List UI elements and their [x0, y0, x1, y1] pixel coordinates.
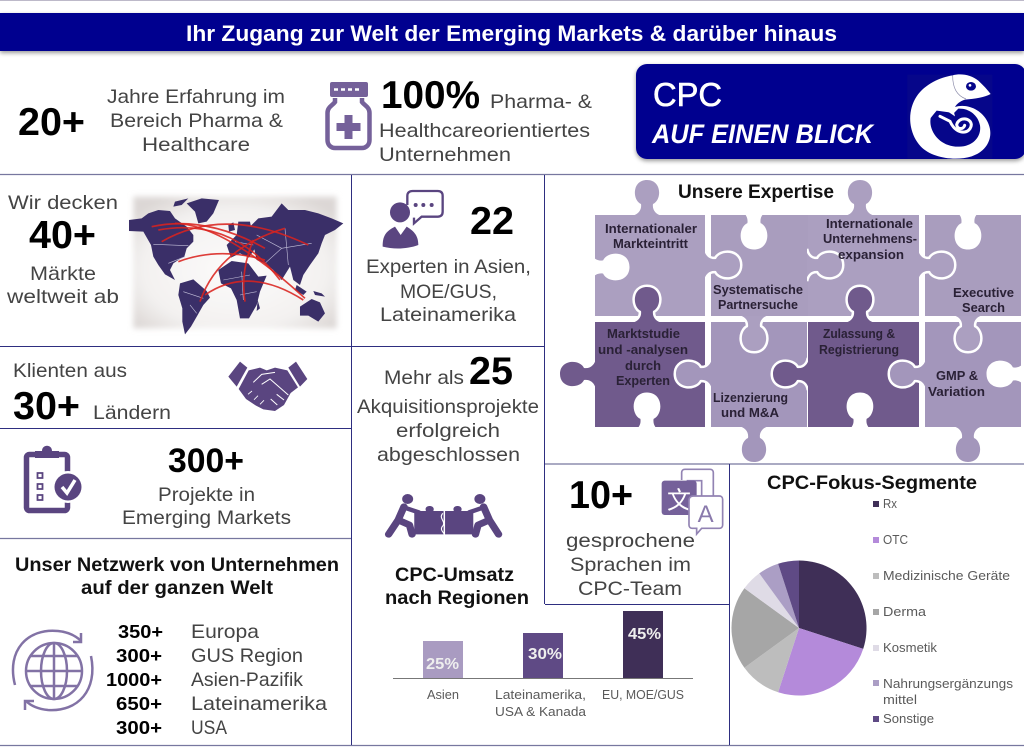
puzzle labels: Markteintritt — [613, 237, 689, 251]
stat: clients from 30+ countries: 30+ — [13, 385, 80, 428]
bar chart: revenue: 45% — [628, 626, 661, 643]
icon: clipboard with check — [26, 446, 84, 510]
stat: 40+ markets: 40+ — [29, 214, 96, 257]
stat: 300+ projects: Projekte in — [158, 484, 255, 506]
puzzle labels: durch — [625, 359, 661, 373]
list: network numbers: 350+ — [118, 621, 163, 642]
heading: network: Unser Netzwerk von Unternehmen — [15, 555, 339, 576]
puzzle labels: und -analysen — [598, 343, 688, 357]
stat: 300+ projects: Emerging Markets — [122, 507, 291, 529]
icon: handshake — [228, 362, 307, 411]
stat: 22 experts: Experten in Asien, — [366, 256, 531, 278]
bar chart: revenue: EU, MOE/GUS — [602, 688, 684, 702]
stat: 300+ projects — [122, 442, 291, 529]
puzzle labels: Variation — [928, 385, 985, 399]
stat: 100% pharma: 100% — [381, 74, 480, 117]
pie legend: Sonstige — [883, 712, 934, 726]
stat: clients from 30+ countries: Klienten aus — [13, 360, 127, 382]
heading: revenue by region — [385, 565, 529, 609]
puzzle labels: Internationale — [826, 217, 913, 231]
title banner: Ihr Zugang zur Welt der Emerging Markets & darüber hinaus — [186, 21, 837, 46]
bar chart: revenue — [393, 611, 693, 719]
stat: 25 acquisition projects: erfolgreich — [396, 420, 500, 442]
icon: medicine bottle — [328, 82, 370, 148]
stat: 10+ languages — [566, 474, 695, 600]
bar chart: revenue: Lateinamerika, — [495, 688, 586, 702]
list: network numbers: Asien-Pazifik — [191, 669, 303, 691]
puzzle labels: Search — [962, 301, 1005, 315]
icon: translation — [662, 469, 723, 534]
stat: 100% pharma: Unternehmen — [379, 144, 511, 166]
stat: 10+ languages: 10+ — [569, 474, 633, 517]
stat: 40+ markets — [6, 192, 119, 308]
list: network numbers: 650+ — [116, 693, 162, 714]
pie legend: Derma — [883, 605, 926, 619]
stat: clients from 30+ countries: Ländern — [93, 402, 171, 424]
stat: 10+ languages: Sprachen im — [570, 554, 691, 576]
list: network numbers: USA — [191, 717, 227, 739]
stat: 10+ languages: CPC-Team — [578, 578, 682, 600]
puzzle labels: Internationaler — [605, 222, 697, 236]
stat: 10+ languages: gesprochene — [566, 530, 695, 552]
panel: CPC auf einen Blick: CPC — [653, 76, 722, 113]
list: network numbers: Lateinamerika — [191, 693, 327, 715]
icon: chameleon logo — [907, 74, 992, 159]
heading: network: auf der ganzen Welt — [81, 578, 274, 599]
list: network numbers: GUS Region — [191, 645, 303, 667]
icon: translation: A — [698, 501, 714, 528]
list: network numbers: 300+ — [116, 717, 162, 738]
puzzle labels: Partnersuche — [718, 298, 798, 312]
pie legend: Medizinische Geräte — [883, 569, 1010, 583]
puzzle labels: expansion — [838, 248, 904, 262]
stat: 20+ years: 20+ — [18, 101, 85, 144]
puzzle labels: Unternehmens- — [823, 232, 917, 246]
heading: revenue by region: nach Regionen — [385, 588, 529, 609]
icon: translation: 文 — [667, 487, 691, 514]
stat: 25 acquisition projects: Akquisitionsprojekte — [357, 396, 539, 418]
heading: network — [15, 555, 339, 599]
list: network numbers: 300+ — [116, 645, 162, 666]
stat: 25 acquisition projects: 25 — [469, 350, 513, 393]
stat: 22 experts — [366, 200, 531, 326]
stat: 20+ years: Bereich Pharma & — [110, 110, 283, 132]
stat: 22 experts: Lateinamerika — [380, 304, 516, 326]
list: network numbers: 1000+ — [106, 669, 162, 690]
bar chart: revenue: 25% — [426, 656, 459, 673]
stat: 40+ markets: Wir decken — [8, 192, 118, 214]
puzzle labels: und M&A — [721, 406, 779, 420]
puzzle labels: Executive — [953, 286, 1014, 300]
stat: 22 experts: MOE/GUS, — [400, 281, 497, 303]
pie chart: focus segments — [731, 560, 867, 696]
stat: 25 acquisition projects: abgeschlossen — [377, 444, 520, 466]
panel: CPC auf einen Blick — [636, 64, 1024, 159]
icon: expert with speech bubble — [383, 191, 443, 248]
list: network numbers: Europa — [191, 621, 259, 643]
stat: 20+ years: Healthcare — [142, 134, 250, 156]
icon: globe with arrows — [13, 631, 92, 710]
pie legend: Rx — [883, 497, 898, 511]
pie legend: mittel — [883, 693, 917, 707]
stat: 100% pharma — [379, 74, 592, 166]
puzzle labels — [598, 217, 1014, 420]
pie legend: Kosmetik — [883, 641, 938, 655]
panel: CPC auf einen Blick: AUF EINEN BLICK — [651, 119, 875, 149]
stat: 25 acquisition projects: Mehr als — [384, 367, 464, 389]
heading: focus segments: CPC-Fokus-Segmente — [767, 473, 977, 494]
stat: 22 experts: 22 — [470, 200, 514, 243]
bar chart: revenue: 30% — [528, 646, 562, 663]
bar chart: revenue: Asien — [427, 688, 459, 702]
stat: 20+ years: Jahre Erfahrung im — [107, 86, 285, 108]
puzzle labels: Systematische — [713, 283, 803, 297]
stat: 25 acquisition projects — [357, 350, 539, 466]
stat: 40+ markets: Märkte — [30, 263, 96, 285]
puzzle labels: Experten — [616, 374, 670, 388]
stat: clients from 30+ countries — [13, 360, 171, 428]
stat: 40+ markets: weltweit ab — [6, 286, 119, 308]
stat: 300+ projects: 300+ — [168, 442, 244, 480]
bar chart: revenue: USA & Kanada — [495, 705, 586, 719]
heading: Unsere Expertise: Unsere Expertise — [678, 182, 834, 203]
title banner — [0, 13, 1024, 51]
heading: revenue by region: CPC-Umsatz — [395, 565, 514, 586]
pie legend: Nahrungsergänzungs — [883, 677, 1013, 691]
stat: 100% pharma: Healthcareorientiertes — [379, 120, 590, 142]
stat: 20+ years — [18, 86, 285, 156]
icon: people joining puzzle — [389, 494, 499, 534]
stat: 100% pharma: Pharma- & — [490, 91, 592, 113]
puzzle labels: Zulassung & — [823, 327, 895, 341]
puzzle labels: Marktstudie — [607, 327, 680, 341]
world map — [129, 197, 343, 334]
pie legend: OTC — [883, 533, 908, 547]
puzzle labels: Lizenzierung — [713, 391, 788, 405]
list: network numbers — [106, 621, 327, 739]
puzzle: expertise — [560, 180, 1024, 462]
puzzle labels: Registrierung — [819, 343, 899, 357]
puzzle labels: GMP & — [936, 369, 978, 383]
pie legend — [873, 497, 1013, 726]
